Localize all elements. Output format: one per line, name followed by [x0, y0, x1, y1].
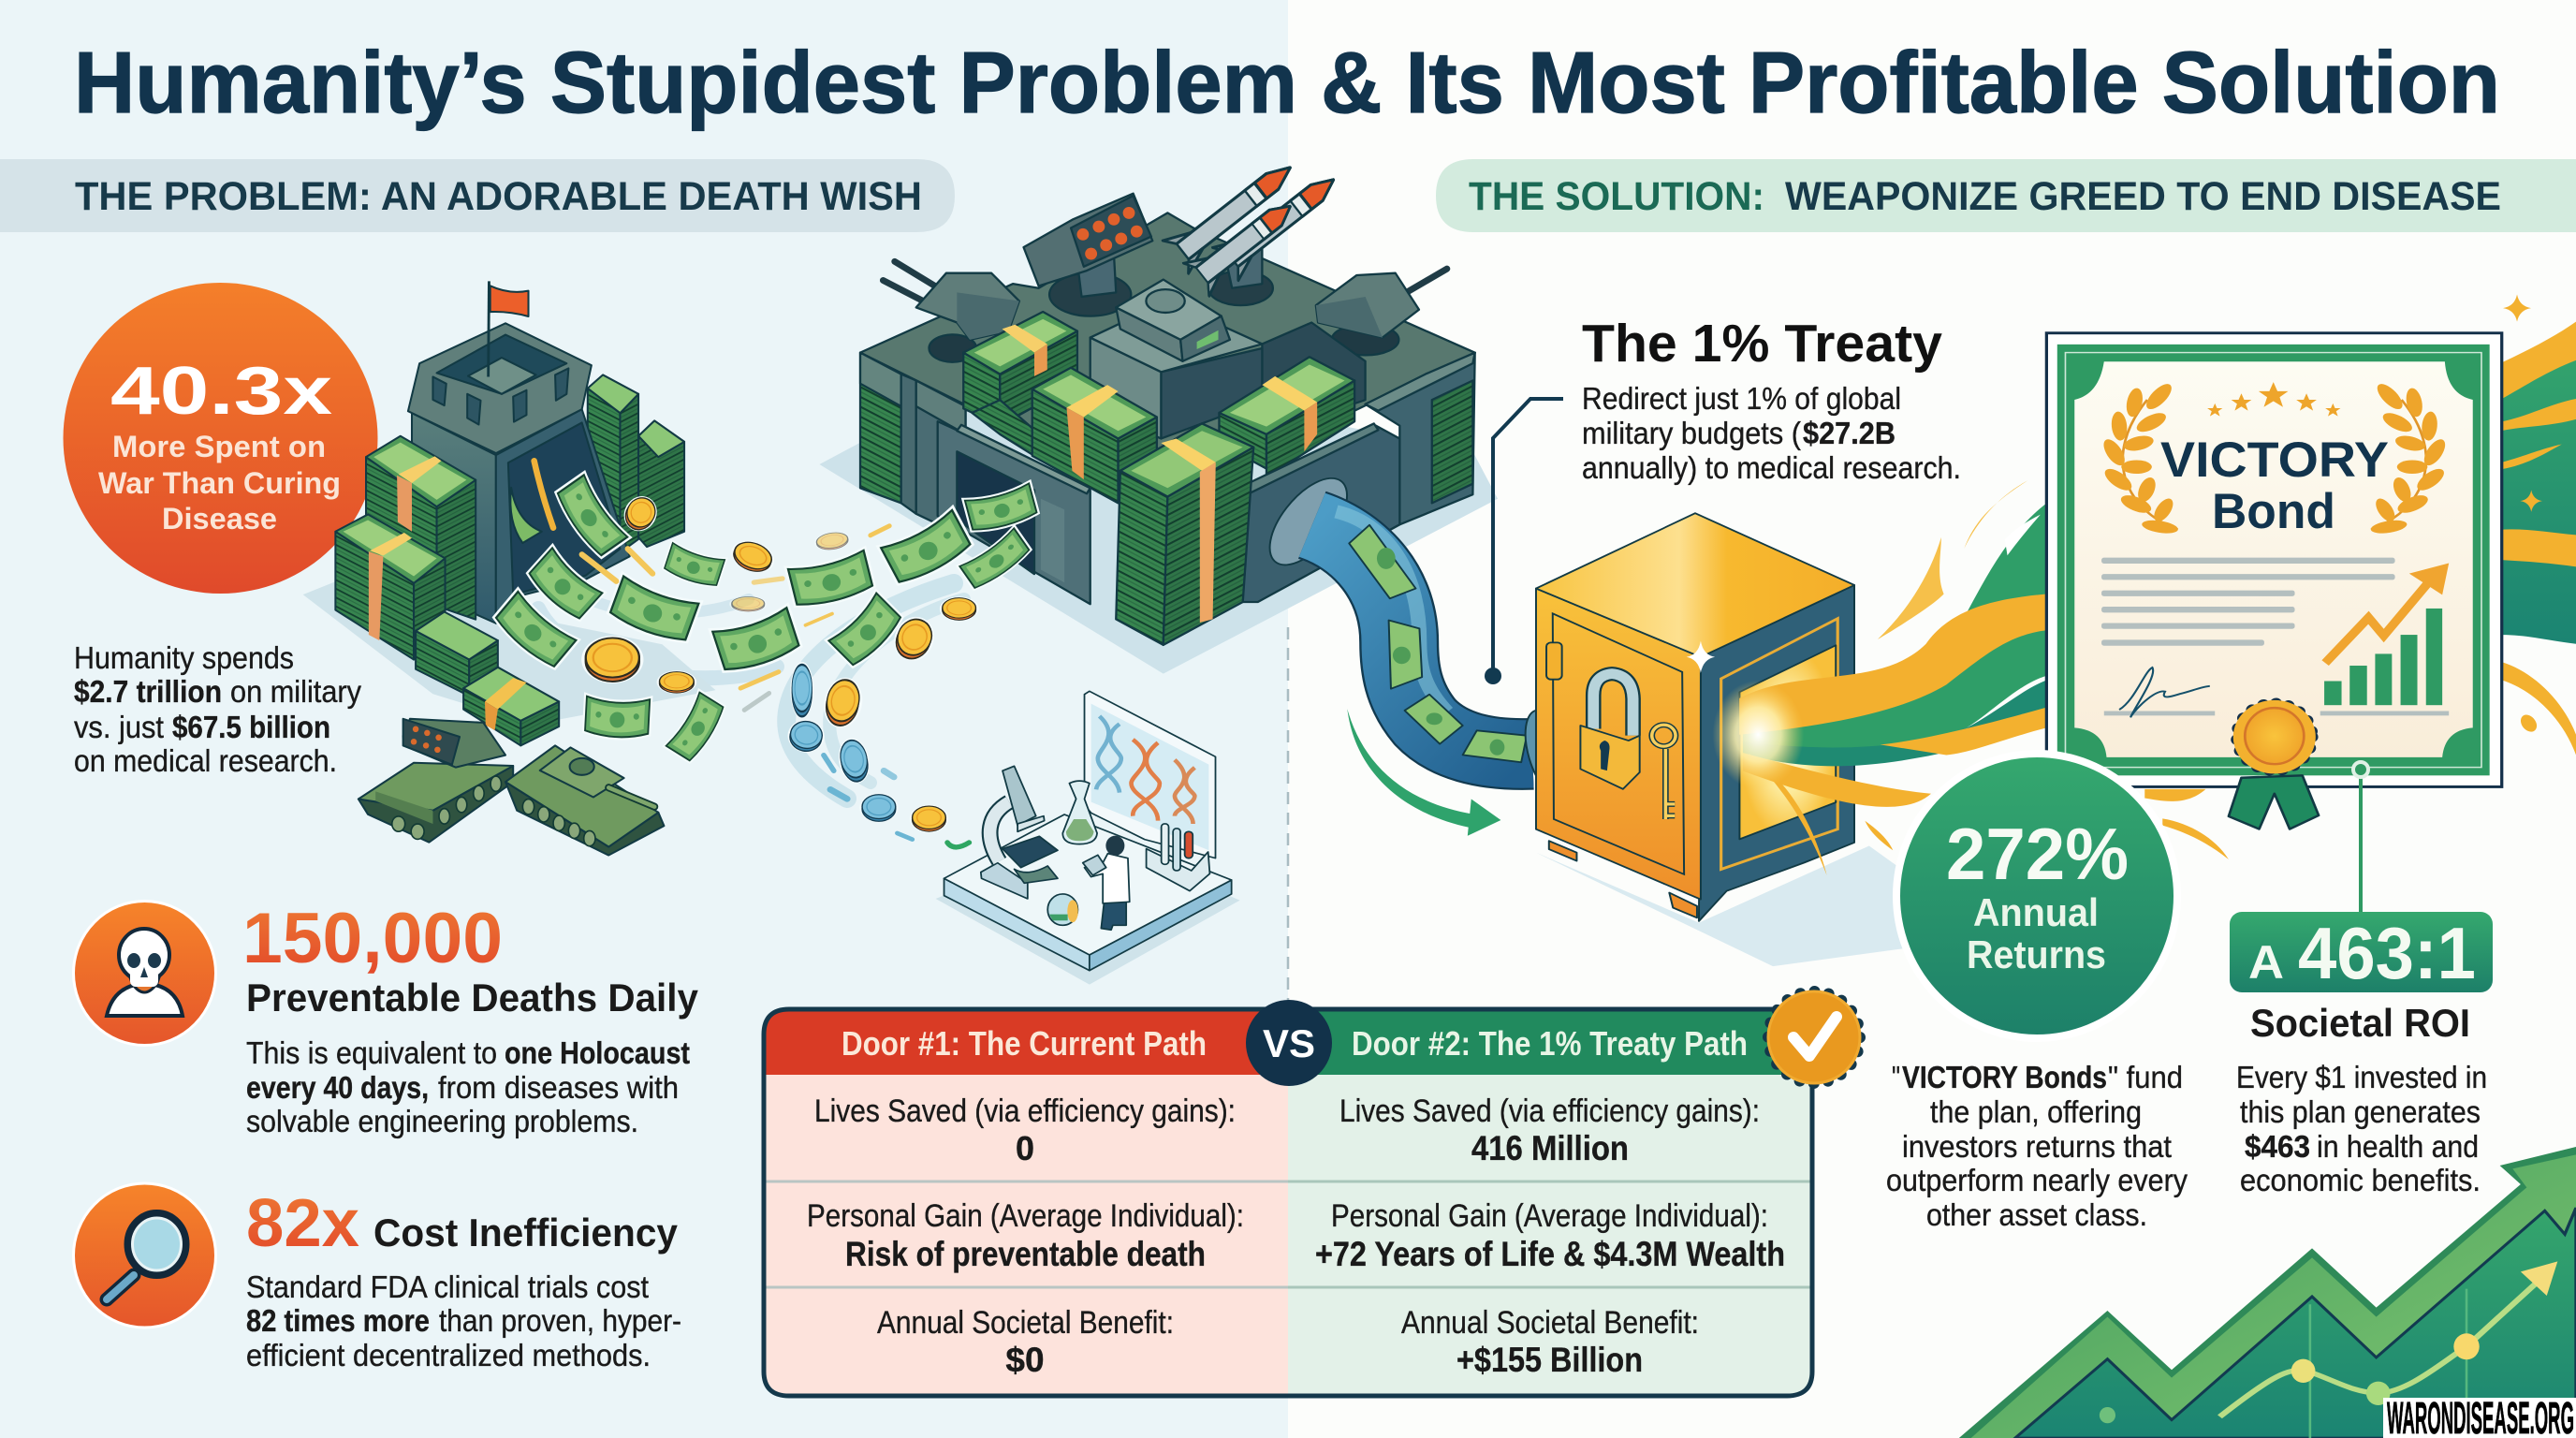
text: spending comparison: on military — [230, 674, 361, 709]
padlock — [1580, 674, 1640, 789]
illustration: money tower with tanks — [303, 281, 904, 856]
large front money stack — [1116, 423, 1253, 645]
text: spending comparison: vs. just — [74, 710, 164, 744]
door 2 panel: +72 Years of Life & $4.3M Wealth — [1315, 1235, 1785, 1273]
text: spending comparison: $67.5 billion — [172, 710, 330, 744]
stat: 150,000 preventable deaths: every 40 days, — [246, 1070, 429, 1105]
door 1 panel: Risk of preventable death — [845, 1235, 1206, 1273]
text: VICTORY bonds — [1886, 1060, 2188, 1232]
stat: 82x cost inefficiency — [246, 1186, 681, 1372]
left turret — [883, 261, 1019, 362]
test tube rack — [1147, 824, 1209, 891]
door 2 panel: +$155 Billion — [1456, 1341, 1643, 1379]
title: Humanity’s Stupidest Problem & Its Most Profitable Solution — [74, 34, 2500, 131]
money flow swoosh shadows — [538, 583, 964, 799]
section banner: the problem: THE PROBLEM: AN ADORABLE DEATH WISH — [75, 174, 922, 219]
text: VICTORY bonds: outperform nearly every — [1886, 1163, 2188, 1197]
door 1 panel: Lives Saved (via efficiency gains): — [814, 1093, 1236, 1129]
money stacks on fortress — [963, 312, 1354, 503]
right turret — [1316, 269, 1447, 355]
door 1 panel: Door #1: The Current Path — [842, 1024, 1207, 1063]
section banner: the solution: THE SOLUTION: — [1469, 174, 1764, 219]
door 1 panel — [764, 1009, 1288, 1396]
centre dashed divider — [1287, 627, 1289, 1006]
round flask — [1047, 894, 1078, 925]
section banner: the solution: WEAPONIZE GREED TO END DISEASE — [1785, 174, 2501, 219]
signature — [2104, 668, 2215, 717]
stat: 82x cost inefficiency: 82 times more — [246, 1303, 430, 1338]
stat bubble: 272% annual returns — [1896, 754, 2177, 1038]
stat: 150,000 preventable deaths: solvable engineering problems. — [246, 1104, 638, 1138]
fortress gate — [938, 421, 1090, 604]
door 2 panel — [1288, 1009, 1812, 1396]
heading: the 1% treaty: The 1% Treaty — [1582, 314, 1942, 374]
text: societal ROI explanation: in health and — [2317, 1129, 2479, 1164]
text: treaty description: Redirect just 1% of global — [1582, 381, 1901, 416]
rocket tank — [359, 719, 513, 843]
illustration: golden vault — [1536, 513, 1995, 966]
door 1 panel: Annual Societal Benefit: — [877, 1305, 1174, 1341]
door 2 panel: Annual Societal Benefit: — [1401, 1305, 1699, 1341]
microscope — [981, 766, 1058, 899]
fortress roof — [860, 213, 1475, 503]
coins and streaks — [581, 491, 889, 732]
illustration: coins falling to the lab — [784, 596, 978, 847]
door 1 panel: $0 — [1005, 1341, 1045, 1379]
text: VICTORY bonds: " — [1892, 1060, 1900, 1094]
stat bubble: 40.3x — [64, 283, 378, 594]
callout line to treaty — [1485, 399, 1563, 684]
text: societal ROI explanation: Every $1 invested in — [2236, 1060, 2487, 1094]
missiles — [1163, 151, 1347, 305]
stat icon: magnifier — [73, 1183, 215, 1328]
money stacks behind tower — [588, 374, 684, 552]
stat bubble: 40.3x: 40.3x — [110, 354, 332, 429]
illustration: pipe carrying money — [1254, 467, 1582, 802]
stat: 150,000 preventable deaths: Preventable Deaths Daily — [246, 976, 699, 1020]
stat: 150,000 preventable deaths: This is equivalent to — [246, 1035, 497, 1070]
stat: 82x cost inefficiency: than proven, hyper- — [439, 1303, 681, 1338]
background: problem side — [0, 0, 1288, 1438]
text: treaty description: $27.2B — [1803, 416, 1895, 450]
stat: 150,000 preventable deaths — [242, 899, 699, 1138]
door 1 panel: Personal Gain (Average Individual): — [807, 1198, 1244, 1234]
text: spending comparison: $2.7 trillion — [74, 674, 222, 709]
text lines — [2101, 558, 2395, 646]
flag — [489, 281, 529, 376]
flask — [1062, 781, 1097, 844]
text: spending comparison — [74, 640, 361, 778]
gold and green money streams — [1712, 295, 2576, 875]
open vault door — [1721, 619, 1837, 870]
fortress left wall — [860, 353, 966, 537]
VS badge: VS — [1263, 1021, 1315, 1065]
VS badge — [1246, 1000, 1332, 1086]
text: treaty description: military budgets ( — [1582, 416, 1801, 450]
text: societal ROI explanation: economic benefits. — [2240, 1163, 2481, 1197]
text: VICTORY bonds: other asset class. — [1926, 1197, 2147, 1232]
laurel wreath — [2100, 380, 2450, 536]
door 2 panel: Lives Saved (via efficiency gains): — [1339, 1093, 1760, 1129]
text: VICTORY bonds: VICTORY Bonds — [1902, 1060, 2107, 1094]
bills leaving the gate — [881, 483, 1038, 667]
mini bar chart — [2324, 609, 2442, 705]
stat: 82x cost inefficiency: efficient decentralized methods. — [246, 1338, 651, 1372]
stat: 150,000 preventable deaths: from diseases with — [438, 1070, 679, 1105]
text: VICTORY bonds: " fund — [2108, 1060, 2183, 1094]
text: societal ROI explanation — [2236, 1060, 2487, 1197]
falling bills — [493, 461, 904, 763]
illustration: armoured money fortress — [819, 151, 1498, 674]
door 2 panel: Door #2: The 1% Treaty Path — [1352, 1024, 1748, 1063]
stat bubble: 40.3x: War Than Curing — [98, 466, 341, 500]
heading: societal ROI: Societal ROI — [2250, 1001, 2470, 1045]
central bunker — [1090, 280, 1366, 438]
stat: 82x cost inefficiency: 82x — [246, 1186, 359, 1261]
key — [1652, 725, 1676, 819]
text: spending comparison: Humanity spends — [74, 640, 294, 675]
green arrow under pipe — [1347, 709, 1500, 836]
rising green arrow chart — [1959, 1147, 2576, 1438]
stat: 82x cost inefficiency: Standard FDA clinical trials cost — [246, 1269, 649, 1304]
stat icon: skull — [73, 901, 215, 1045]
text: treaty description — [1582, 381, 1961, 485]
background: solution side — [1288, 0, 2576, 1438]
text: VICTORY bonds: investors returns that — [1902, 1129, 2172, 1164]
stat: 150,000 preventable deaths: 150,000 — [242, 899, 503, 978]
text: treaty description: annually) to medical research. — [1582, 450, 1961, 485]
tower — [408, 323, 630, 624]
check badge — [1768, 991, 1860, 1083]
lab platform — [944, 814, 1232, 971]
section banner: the solution — [1436, 159, 2576, 232]
door 2 panel: 416 Million — [1471, 1129, 1629, 1167]
large money stacks — [335, 436, 559, 745]
certificate: victory bond: VICTORY — [2160, 433, 2389, 488]
stat box: 463:1: A — [2248, 936, 2284, 989]
illustration: research lab — [936, 691, 1240, 985]
stat bubble: 40.3x: More Spent on — [112, 430, 326, 463]
section banner: the problem — [0, 159, 955, 232]
stat: 82x cost inefficiency: Cost Inefficiency — [373, 1211, 679, 1255]
bills inside pipe — [1349, 525, 1527, 762]
scientist — [1083, 836, 1130, 930]
connector to societal ROI — [2353, 762, 2368, 913]
missile launcher — [1024, 194, 1152, 316]
seal with ribbon — [2229, 702, 2319, 829]
certificate: victory bond — [2046, 333, 2502, 829]
growth line with points — [2100, 1261, 2557, 1423]
stat: 150,000 preventable deaths: one Holocaust — [505, 1035, 690, 1070]
door 2 panel: Personal Gain (Average Individual): — [1331, 1198, 1768, 1234]
text: societal ROI explanation: this plan generates — [2240, 1094, 2481, 1129]
DNA display screen — [1085, 691, 1216, 858]
battle tank — [505, 745, 664, 856]
stat bubble: 272% annual returns: Returns — [1967, 932, 2106, 976]
stars — [2207, 382, 2340, 417]
text: VICTORY bonds: the plan, offering — [1930, 1094, 2142, 1129]
certificate: victory bond: Bond — [2212, 484, 2335, 539]
comparison table — [764, 991, 1860, 1396]
stat bubble: 272% annual returns: 272% — [1946, 813, 2129, 895]
stat bubble: 272% annual returns: Annual — [1973, 890, 2099, 934]
door 1 panel: 0 — [1016, 1129, 1034, 1167]
stat box: 463:1: 463:1 — [2298, 912, 2476, 994]
stat bubble: 40.3x: Disease — [162, 502, 277, 536]
right wall — [1243, 353, 1475, 602]
text: spending comparison: on medical research. — [74, 743, 337, 778]
text: societal ROI explanation: $463 — [2245, 1129, 2310, 1164]
